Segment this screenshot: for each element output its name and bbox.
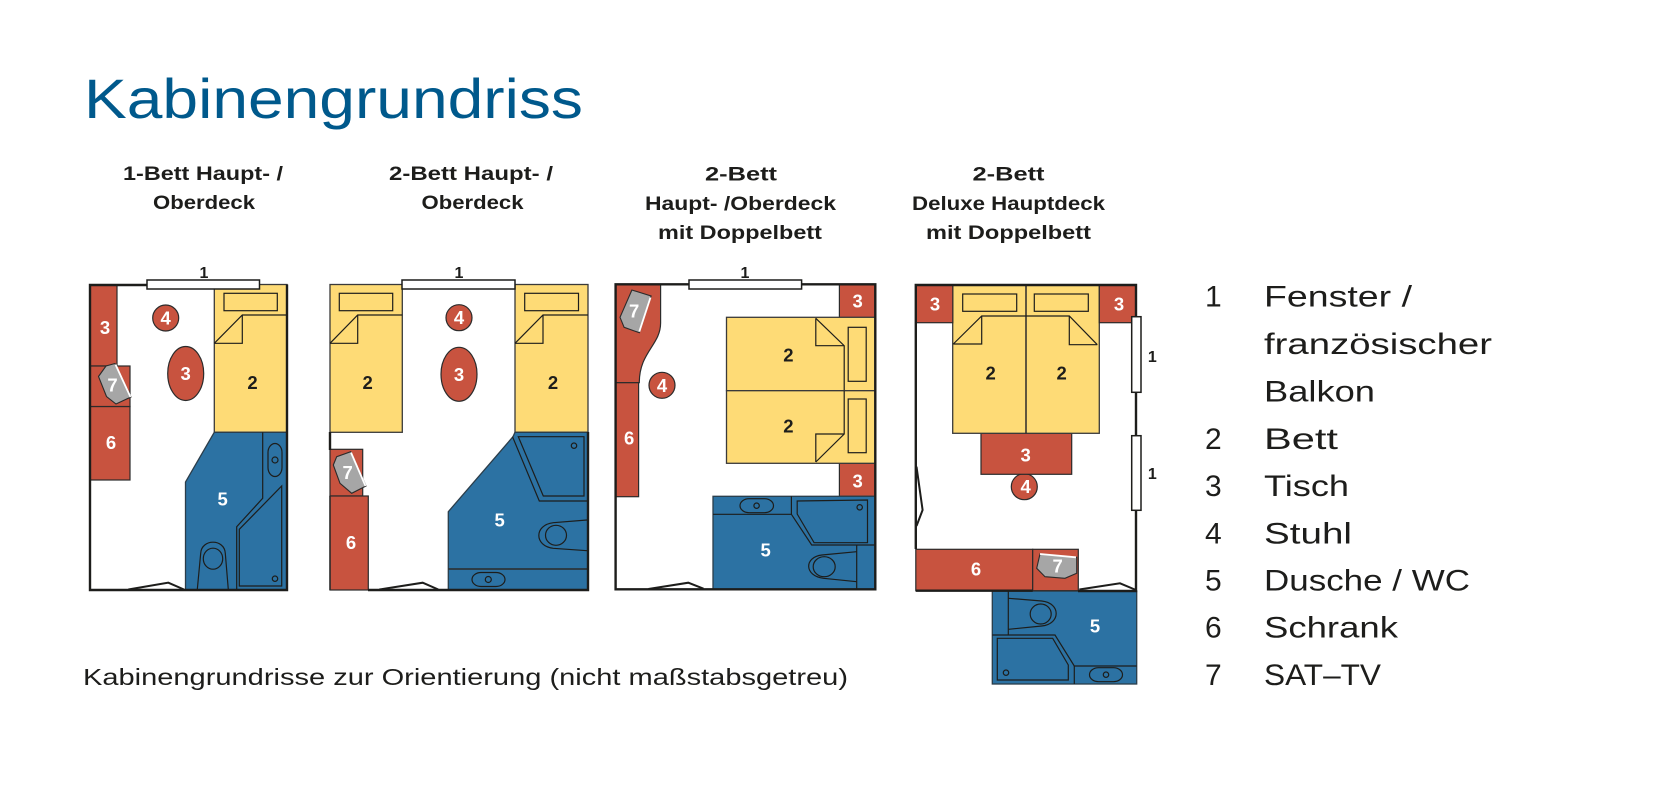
legend item 5: 5 xyxy=(1205,565,1222,598)
wardrobe 6: 6 xyxy=(971,558,981,580)
heading: 2-Bett Haupt-/Oberdeck: 2-Bett Haupt- / xyxy=(389,164,554,185)
window 1: 1 xyxy=(741,265,750,282)
bedside table 3 top xyxy=(839,284,875,318)
heading: 2-Bett Haupt-/Oberdeck mit Doppelbett xyxy=(645,164,837,244)
bedside table 3 right xyxy=(1099,285,1136,323)
heading: 1-Bett Haupt-/Oberdeck xyxy=(123,164,284,214)
double bed 2 2: 2 xyxy=(986,363,996,384)
bedside table 3 right: 3 xyxy=(1114,294,1124,314)
legend item 6 xyxy=(1205,612,1399,645)
legend item 1: französischer xyxy=(1264,328,1492,361)
heading: 1-Bett Haupt-/Oberdeck: Oberdeck xyxy=(153,193,255,214)
legend item 7 xyxy=(1205,659,1381,692)
chair 4 xyxy=(1011,474,1037,500)
floor plan: 2-Bett cabin with double bed xyxy=(616,265,875,589)
TV stand with SAT-TV 7 xyxy=(330,449,366,496)
heading: 2-Bett Haupt-/Oberdeck mit Doppelbett: Haupt- /Oberdeck xyxy=(645,194,837,215)
floor plan: 2-Bett cabin xyxy=(330,265,588,590)
table 3 on wall: 3 xyxy=(100,317,110,338)
bathroom 5 xyxy=(186,432,287,590)
caption: Kabinengrundrisse zur Orientierung (nicht maßstabsgetreu) xyxy=(83,664,848,690)
wardrobe 6: 6 xyxy=(106,432,116,453)
heading: 2-Bett Deluxe Hauptdeck mit Doppelbett: mit Doppelbett xyxy=(926,223,1092,244)
legend item 6: 6 xyxy=(1205,612,1222,645)
walls and door xyxy=(616,284,875,589)
TV corner with SAT-TV 7: 7 xyxy=(629,300,639,322)
wardrobe 6 xyxy=(916,549,1033,591)
legend xyxy=(1205,281,1492,692)
legend item 4: Stuhl xyxy=(1264,517,1352,550)
bathroom 5 xyxy=(713,496,875,589)
TV stand with SAT-TV 7: 7 xyxy=(343,462,353,483)
window 1 lower xyxy=(1132,436,1157,510)
chair 4: 4 xyxy=(161,308,172,328)
legend item 1 xyxy=(1205,281,1492,409)
legend item 2 xyxy=(1205,423,1339,456)
chair 4: 4 xyxy=(454,307,465,328)
heading: 2-Bett Haupt-/Oberdeck mit Doppelbett: 2-Bett xyxy=(705,164,778,186)
wardrobe 6: 6 xyxy=(346,532,356,553)
bed 2: 2 xyxy=(247,372,258,393)
window 1: 1 xyxy=(200,265,209,282)
left bed 2: 2 xyxy=(363,372,373,393)
top bed 2 xyxy=(726,317,875,391)
wardrobe 6 xyxy=(616,383,639,497)
heading: 1-Bett Haupt-/Oberdeck: 1-Bett Haupt- / xyxy=(123,164,284,185)
walls and door xyxy=(330,432,588,590)
heading: 2-Bett Deluxe Hauptdeck mit Doppelbett: Deluxe Hauptdeck xyxy=(912,194,1105,215)
bathroom 5: 5 xyxy=(1090,616,1100,636)
legend item 4: 4 xyxy=(1205,517,1222,550)
legend item 6: Schrank xyxy=(1264,612,1399,645)
oval table 3: 3 xyxy=(181,363,191,384)
window 1 upper xyxy=(1132,317,1157,392)
legend item 5 xyxy=(1205,565,1470,598)
table 3: 3 xyxy=(1021,444,1031,466)
chair 4 xyxy=(153,305,179,331)
chair 4 xyxy=(649,372,675,398)
table 3 xyxy=(981,433,1072,474)
window 1 xyxy=(402,265,515,289)
legend item 3 xyxy=(1205,470,1349,503)
window 1 xyxy=(689,265,802,289)
legend item 4 xyxy=(1205,517,1352,550)
wardrobe 6 xyxy=(90,406,130,480)
bathroom 5 xyxy=(992,591,1137,684)
floor plan: 1-Bett cabin xyxy=(90,265,287,590)
title: Kabinengrundriss xyxy=(84,67,583,130)
bedside table 3 top: 3 xyxy=(853,290,863,312)
legend item 2: Bett xyxy=(1264,423,1339,456)
right bed 2 xyxy=(515,284,588,432)
bottom bed 2 xyxy=(726,391,875,463)
chair 4: 4 xyxy=(657,375,668,396)
TV stand with SAT-TV 7: 7 xyxy=(1053,556,1063,576)
window 1 xyxy=(147,265,260,289)
legend item 2: 2 xyxy=(1205,423,1222,456)
legend item 3: Tisch xyxy=(1264,470,1349,503)
heading: 2-Bett Deluxe Hauptdeck mit Doppelbett xyxy=(912,164,1105,244)
legend item 1: Fenster / xyxy=(1264,281,1413,314)
bathroom 5: 5 xyxy=(761,540,771,561)
top bed 2: 2 xyxy=(783,345,794,366)
oval table 3 xyxy=(441,347,477,401)
right bed 2: 2 xyxy=(548,372,558,393)
oval table 3: 3 xyxy=(454,364,464,385)
legend item 1: Balkon xyxy=(1264,376,1375,409)
bed 2 xyxy=(214,284,287,432)
TV stand with SAT-TV 7 xyxy=(1033,549,1078,591)
heading: 2-Bett Deluxe Hauptdeck mit Doppelbett: 2-Bett xyxy=(972,164,1045,186)
bedside table 3 bottom: 3 xyxy=(853,470,863,492)
legend item 7: SAT–TV xyxy=(1264,659,1381,692)
walls and doors xyxy=(916,285,1136,591)
heading: 2-Bett Haupt-/Oberdeck: Oberdeck xyxy=(422,193,524,214)
bedside table 3 bottom xyxy=(839,463,875,496)
legend item 3: 3 xyxy=(1205,470,1222,503)
wardrobe 6: 6 xyxy=(624,428,634,448)
legend item 5: Dusche / WC xyxy=(1264,565,1470,598)
window 1 lower: 1 xyxy=(1148,466,1157,483)
bathroom 5 xyxy=(448,432,588,590)
chair 4: 4 xyxy=(1021,476,1032,497)
window 1 upper: 1 xyxy=(1148,349,1157,366)
TV stand with SAT-TV 7 xyxy=(90,364,131,406)
double bed 2 2: 2 xyxy=(1057,363,1067,384)
oval table 3 xyxy=(168,346,204,400)
legend item 1: 1 xyxy=(1205,281,1222,314)
TV corner with SAT-TV 7 xyxy=(616,284,661,383)
bathroom 5: 5 xyxy=(218,488,228,510)
walls and door xyxy=(90,284,287,590)
heading: 2-Bett Haupt-/Oberdeck xyxy=(389,164,554,214)
table 3 on wall xyxy=(90,285,117,366)
wardrobe 6 xyxy=(330,496,368,590)
heading: 2-Bett Haupt-/Oberdeck mit Doppelbett: mit Doppelbett xyxy=(658,223,823,244)
bedside table 3 left: 3 xyxy=(930,294,940,314)
bathroom 5: 5 xyxy=(495,510,505,530)
bedside table 3 left xyxy=(916,285,953,323)
chair 4 xyxy=(446,305,472,331)
double bed 2 2 xyxy=(953,285,1099,433)
legend item 7: 7 xyxy=(1205,659,1222,692)
bottom bed 2: 2 xyxy=(783,415,794,436)
TV stand with SAT-TV 7: 7 xyxy=(107,374,118,396)
floor plan: Deluxe cabin with double bed xyxy=(916,285,1157,684)
window 1: 1 xyxy=(455,265,464,282)
left bed 2 xyxy=(330,284,402,432)
